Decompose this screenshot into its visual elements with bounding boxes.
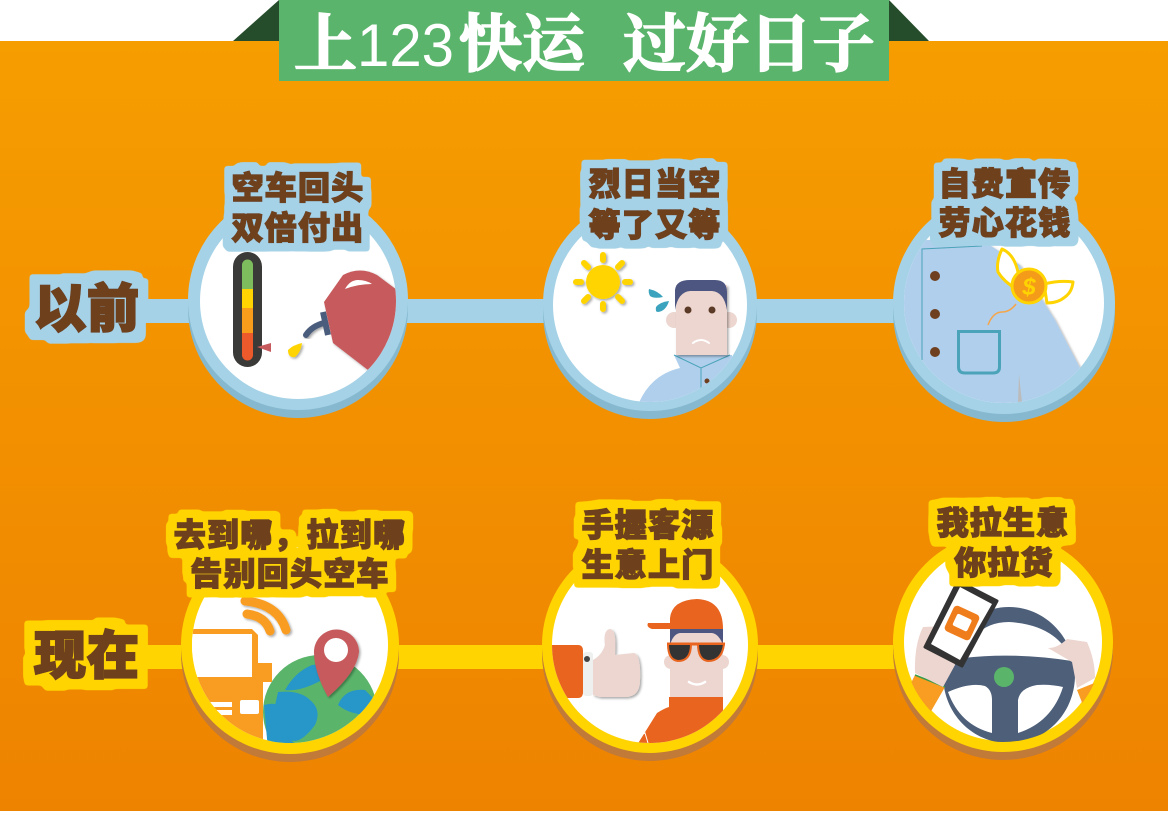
icon: right hand and sleeve: [1048, 639, 1097, 705]
panel: app brings business: [893, 505, 1113, 760]
icon: flying coin: [998, 249, 1073, 303]
icon: sweat drops: [649, 289, 669, 312]
icon: map pin: [314, 630, 359, 697]
caption: 烈日当空: [589, 166, 721, 202]
title banner: 123: [357, 12, 454, 79]
caption: 双倍付出: [232, 210, 364, 246]
panel: customers in hand: [542, 507, 758, 761]
caption: 告别回头空车: [190, 556, 390, 592]
icon: flying coin: $: [1021, 274, 1036, 301]
row label: now: 现在: [34, 628, 140, 686]
row label: before: 以前: [34, 281, 140, 339]
icon: man with cap and sunglasses: [634, 599, 729, 750]
caption: 去到哪，拉到哪: [174, 517, 406, 553]
panel: empty return: [188, 170, 408, 418]
caption: 你拉货: [954, 545, 1054, 581]
icon: thumbs up: [550, 629, 640, 698]
caption: 自费宣传: [939, 166, 1071, 202]
caption: 空车回头: [232, 170, 364, 206]
caption: [232, 170, 364, 246]
caption: 劳心花钱: [939, 205, 1071, 241]
caption: 生意上门: [582, 547, 714, 583]
caption: [589, 166, 721, 243]
icon: shirt with pocket: [904, 240, 1082, 403]
icon: phone with app: [925, 581, 997, 666]
icon: wifi signal: [245, 601, 286, 631]
caption: 我拉生意: [937, 505, 1069, 541]
caption: [939, 166, 1071, 241]
icon: steering wheel: [943, 607, 1075, 743]
panel: go anywhere: [174, 517, 406, 769]
icon: fuel can: [288, 270, 397, 370]
icon: sun: [576, 255, 630, 309]
icon: globe: [263, 655, 374, 743]
caption: [174, 517, 406, 592]
icon: fuel gauge: [233, 252, 271, 367]
caption: 手握客源: [582, 507, 714, 543]
icon: green hub: [994, 667, 1014, 687]
caption: [937, 505, 1069, 581]
caption: 等了又等: [589, 207, 721, 243]
icon: worried man: [638, 280, 737, 410]
panel: waiting in the sun: [543, 166, 757, 419]
connector: before row: [130, 299, 930, 323]
icon: truck: [192, 629, 272, 740]
caption: [582, 507, 714, 583]
panel: self-paid advertising: [893, 166, 1115, 422]
icon: left hand and sleeve: [912, 626, 955, 712]
connector: now row: [130, 645, 930, 669]
title banner: [233, 0, 929, 85]
